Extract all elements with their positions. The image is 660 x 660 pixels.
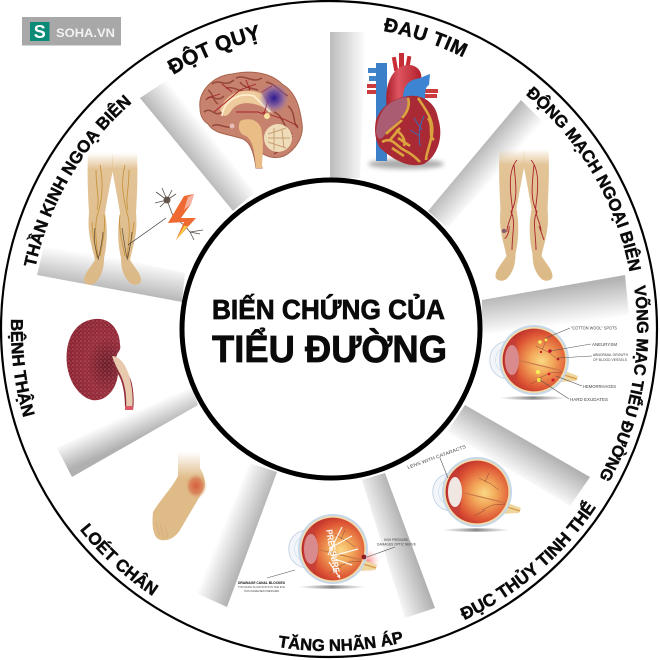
panel: gray spoke Võng mạc [482,275,629,342]
label: Loét chân: LOÉT CHÂN [80,522,159,596]
title: TIỂU ĐƯỜNG [212,326,447,371]
panel: gray spoke Loét chân [196,463,277,607]
icon: eye with glaucoma: DRAINAGE CANAL BLOCKED [238,581,286,585]
label: Bệnh thận: BỆNH THẬN [8,320,35,417]
logo: Soha.vn: SOHA.VN [56,26,115,40]
logo: Soha.vn [22,17,121,46]
label: Đau tim: ĐAU TIM [384,18,468,58]
label: Đột quỵ: ĐỘT QUỴ [166,24,258,74]
icon: brain [200,72,302,168]
icon: legs with blocked arteries [496,149,552,281]
icon: eye with glaucoma: PRESSURE [324,529,342,574]
callouts: retinopathy labels: HEMORRHAGES [583,384,616,389]
callouts: retinopathy labels: "COTTON WOOL" SPOTS [571,326,617,330]
callouts: retinopathy labels: HARD EXUDATES [570,397,608,402]
logo: Soha.vn: S [34,22,46,42]
callouts: retinopathy labels: ANEURYSM [592,342,617,347]
panel: gray spoke Đục thủy tinh thể [447,405,590,506]
callouts: retinopathy labels [540,326,628,402]
panel: gray spoke Tăng nhãn áp [362,473,435,618]
icon: foot with ulcer [153,452,207,540]
label: Thần kinh ngoại biên: THẦN KINH NGOẠ BIÊN [24,94,132,266]
icon: eye with cataract [407,444,521,532]
icon: eye with glaucoma: HIGH PRESSURE [384,538,408,542]
center circle [182,180,480,478]
icon: legs with nerves [84,153,141,285]
icon: kidney [67,319,134,410]
callouts: retinopathy labels: ABNORMAL GROWTH [593,352,628,357]
title: BIẾN CHỨNG CỦA [212,293,445,325]
icon: eye with glaucoma: DAMAGES OPTIC NERVE [377,542,416,546]
callouts: retinopathy labels: OF BLOOD VESSELS [593,357,627,362]
icon: eye with glaucoma: THIS INCREASES PRESSURE [244,589,279,593]
panel: gray spoke Động mạch ngoại biên [428,100,545,228]
panel: gray spoke Bệnh thận [57,382,198,477]
label: Đục thủy tinh thể: ĐỤC THỦY TINH THỂ [460,500,596,620]
icon: eye with glaucoma [238,514,416,593]
label: Võng mạc tiểu đường: VÕNG MẠC TIỂU ĐƯỜNG [600,284,651,481]
icon: eye with cataract: LENS WITH CATARACTS [407,444,467,470]
icon: eye with diabetic retinopathy [490,325,578,400]
panel: gray spoke Đau tim [330,32,366,178]
label: Động mạch ngoại biên: ĐỘNG MẠCH NGOẠI BIÊN [526,86,642,272]
panel: gray spoke Đột quỵ [140,80,255,211]
title [212,293,447,371]
icon: eye with glaucoma: TOO MUCH FLUID STAYS IN THE EYE [238,585,285,589]
panel: gray spoke Thần kinh ngoại biên [37,242,185,302]
label: Tăng nhãn áp: TĂNG NHÃN ÁP [279,630,402,652]
icon: neuron with lightning [128,188,203,245]
icon: heart [367,53,444,169]
